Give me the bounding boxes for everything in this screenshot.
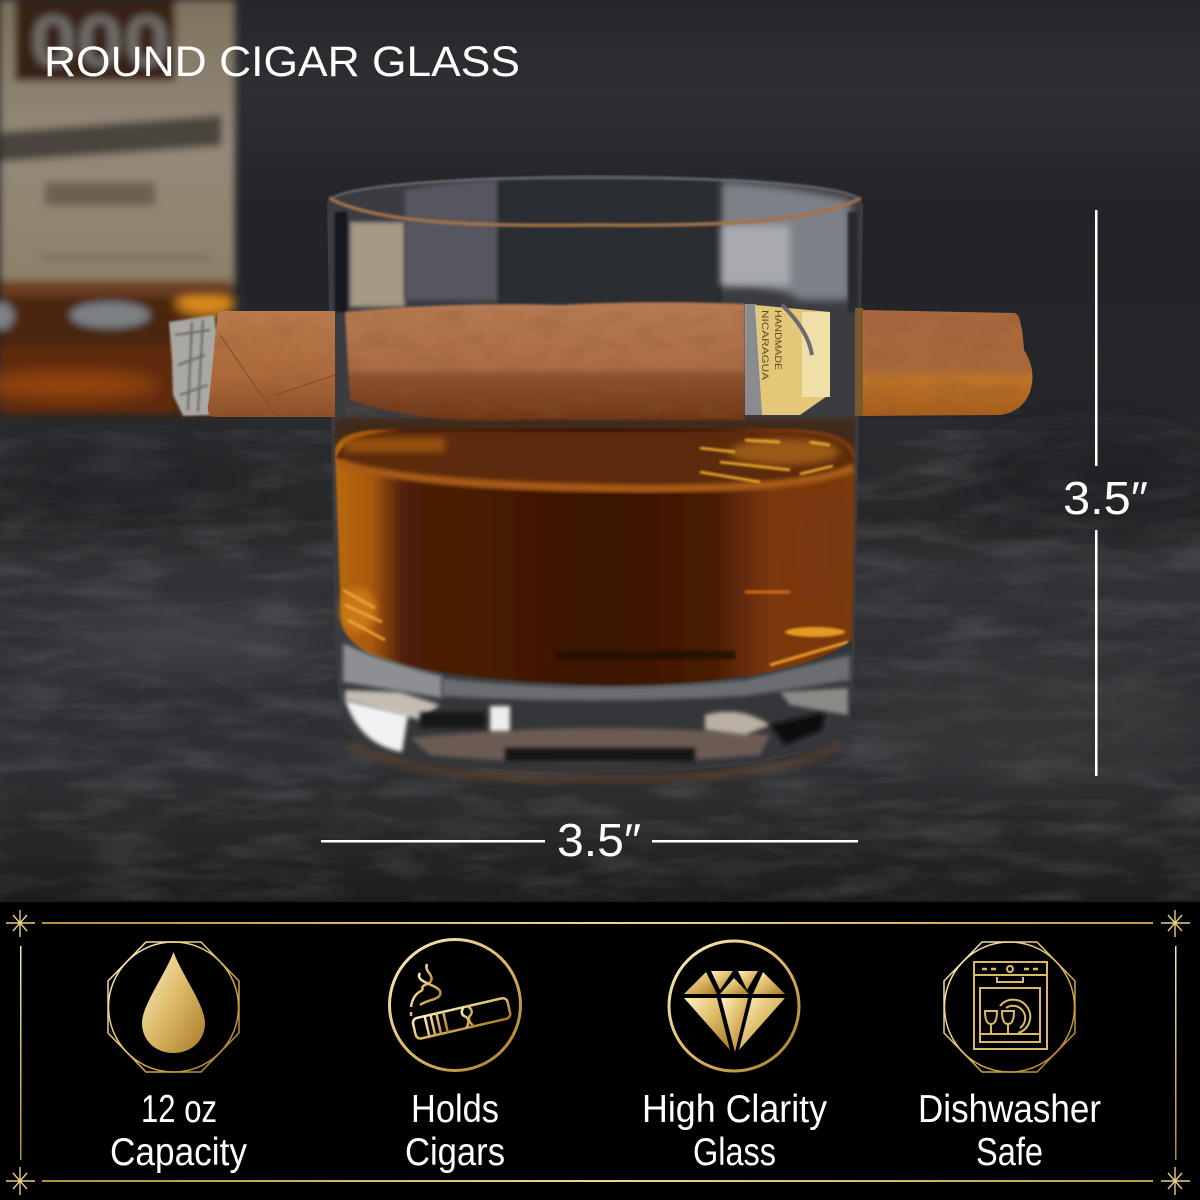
heavy glass base — [343, 640, 852, 778]
icon: dishwasher in octagon — [944, 942, 1075, 1072]
label: dishwasher safe: Dishwasher — [918, 1088, 1101, 1131]
cigar through glass — [345, 302, 745, 421]
label: holds cigars: Cigars — [405, 1131, 505, 1174]
cigar leaf texture — [214, 310, 1021, 418]
label: 12 oz capacity: 12 oz — [141, 1088, 217, 1131]
dark wall background — [0, 0, 1200, 430]
cigar — [169, 302, 1032, 421]
label: high clarity glass: Glass — [693, 1131, 776, 1174]
cigar left section — [208, 311, 335, 417]
whiskey bottle in background — [0, 0, 235, 415]
label: dishwasher safe: Safe — [976, 1131, 1043, 1174]
rim of the glass — [329, 178, 861, 225]
label: 12 oz capacity: Capacity — [110, 1131, 247, 1174]
features panel — [0, 902, 1200, 1200]
label: high clarity glass: High Clarity — [642, 1088, 827, 1131]
cigar band label — [745, 304, 830, 415]
label: holds cigars: Holds — [411, 1088, 499, 1131]
cigar band label: HANDMADE — [773, 310, 783, 370]
title: ROUND CIGAR GLASS — [44, 38, 520, 86]
label: high clarity glass — [642, 1088, 827, 1174]
height dimension: 3.5″ — [1063, 472, 1148, 524]
liquid top surface — [336, 432, 854, 492]
label: 12 oz capacity — [110, 1088, 247, 1174]
width dimension: 3.5″ — [557, 814, 641, 866]
photo: glass with cigar on table — [0, 0, 1200, 902]
icon: diamond in circle — [669, 941, 799, 1071]
slate table surface — [0, 418, 1200, 902]
decorative gold frame — [6, 910, 1190, 1195]
label: dishwasher safe — [918, 1088, 1101, 1174]
liquid bottom highlights — [340, 490, 848, 665]
table texture — [0, 430, 1200, 900]
label: holds cigars — [405, 1088, 505, 1174]
cigar band label: NICARAGUA — [760, 310, 770, 380]
whiskey bottle in background: 000 — [30, 2, 170, 82]
icon: drop in octagon — [108, 942, 239, 1072]
icon: cigar in circle — [390, 940, 520, 1070]
cigar ash tip — [169, 315, 218, 416]
glass body — [327, 175, 863, 772]
cigar right section — [862, 310, 1032, 416]
whisky liquid — [335, 429, 855, 685]
